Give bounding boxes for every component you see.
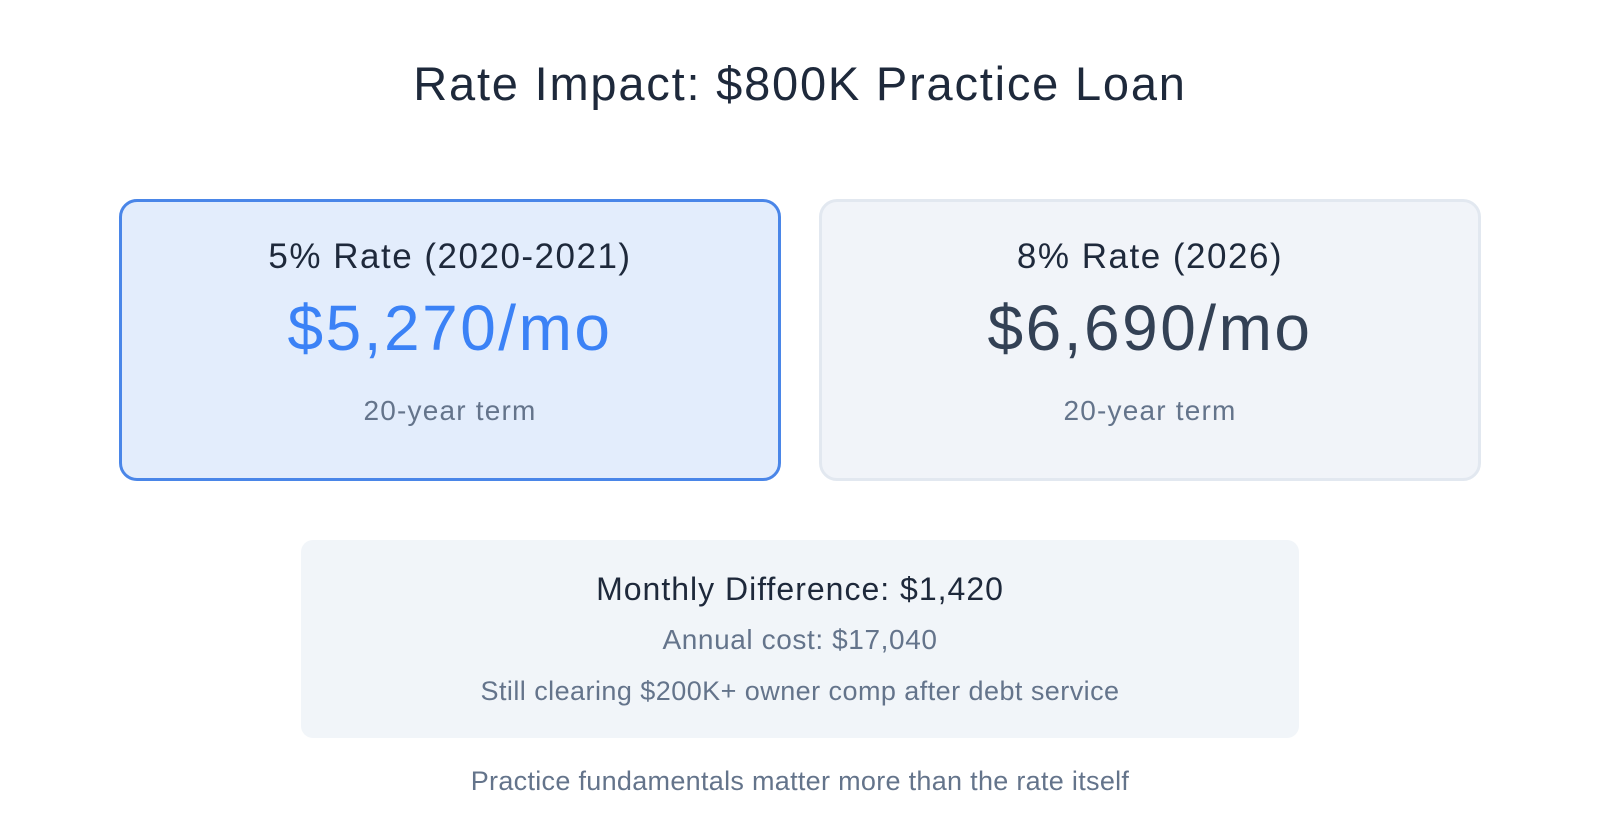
title: Rate Impact: $800K Practice Loan xyxy=(413,57,1187,110)
text: term: 20-year term xyxy=(363,395,537,426)
heading: monthly difference: Monthly Difference: $1,420 xyxy=(596,571,1004,607)
panel: difference summary xyxy=(301,540,1299,738)
panel: 8% rate card xyxy=(819,199,1481,481)
text: annual cost: Annual cost: $17,040 xyxy=(662,624,938,655)
panel: 5% rate card xyxy=(119,199,781,481)
heading: 8% rate: 8% Rate (2026) xyxy=(1017,237,1283,276)
footer note: Practice fundamentals matter more than the rate itself xyxy=(471,766,1129,796)
text: term: 20-year term xyxy=(1063,395,1237,426)
value: monthly payment 8%: $6,690/mo xyxy=(988,292,1312,364)
value: monthly payment 5%: $5,270/mo xyxy=(288,292,612,364)
heading: 5% rate: 5% Rate (2020-2021) xyxy=(268,237,632,276)
text: owner comp note: Still clearing $200K+ owner comp after debt service xyxy=(480,676,1120,706)
